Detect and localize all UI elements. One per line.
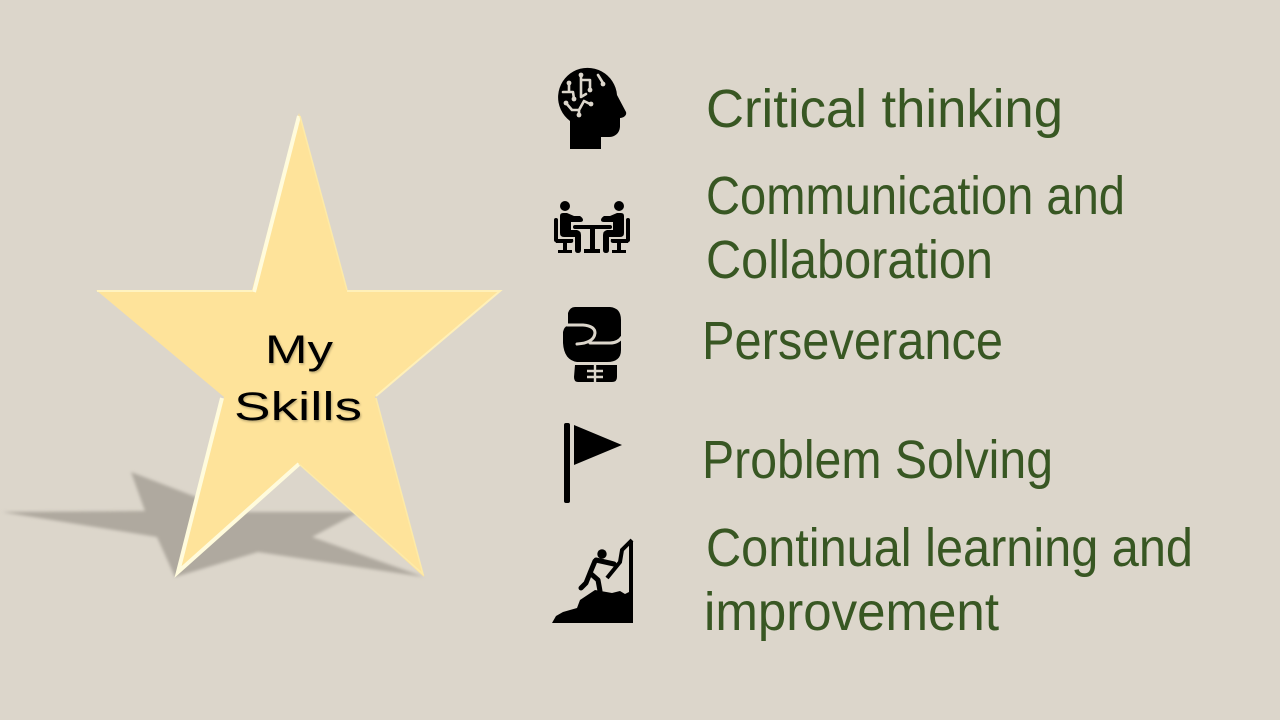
- star label: My Skills: Skills: [234, 385, 362, 429]
- star: [96, 113, 502, 577]
- skill: Communication and Collaboration: [706, 166, 1125, 290]
- skill: Perseverance: Perseverance: [702, 311, 1003, 371]
- skill: Communication and Collaboration: Communication and: [706, 166, 1125, 226]
- skill: Continual learning and improvement: [704, 518, 1193, 642]
- skill: Communication and Collaboration: Collaboration: [706, 230, 993, 290]
- star shadow: [2, 472, 424, 577]
- star label: My Skills: My: [265, 328, 333, 372]
- skill: Problem Solving: Problem Solving: [702, 430, 1053, 490]
- icon: two people at a table: [554, 201, 630, 253]
- icon: climber on mountain: [552, 540, 633, 623]
- skill: Continual learning and improvement: Continual learning and: [706, 518, 1193, 578]
- icon: boxing glove: [563, 307, 622, 383]
- skill: Critical thinking: Critical thinking: [706, 79, 1063, 139]
- skill: Continual learning and improvement: improvement: [704, 582, 999, 642]
- icon: head with circuit brain: [558, 68, 626, 149]
- icon: flag: [564, 423, 622, 503]
- star label: My Skills: [234, 328, 362, 429]
